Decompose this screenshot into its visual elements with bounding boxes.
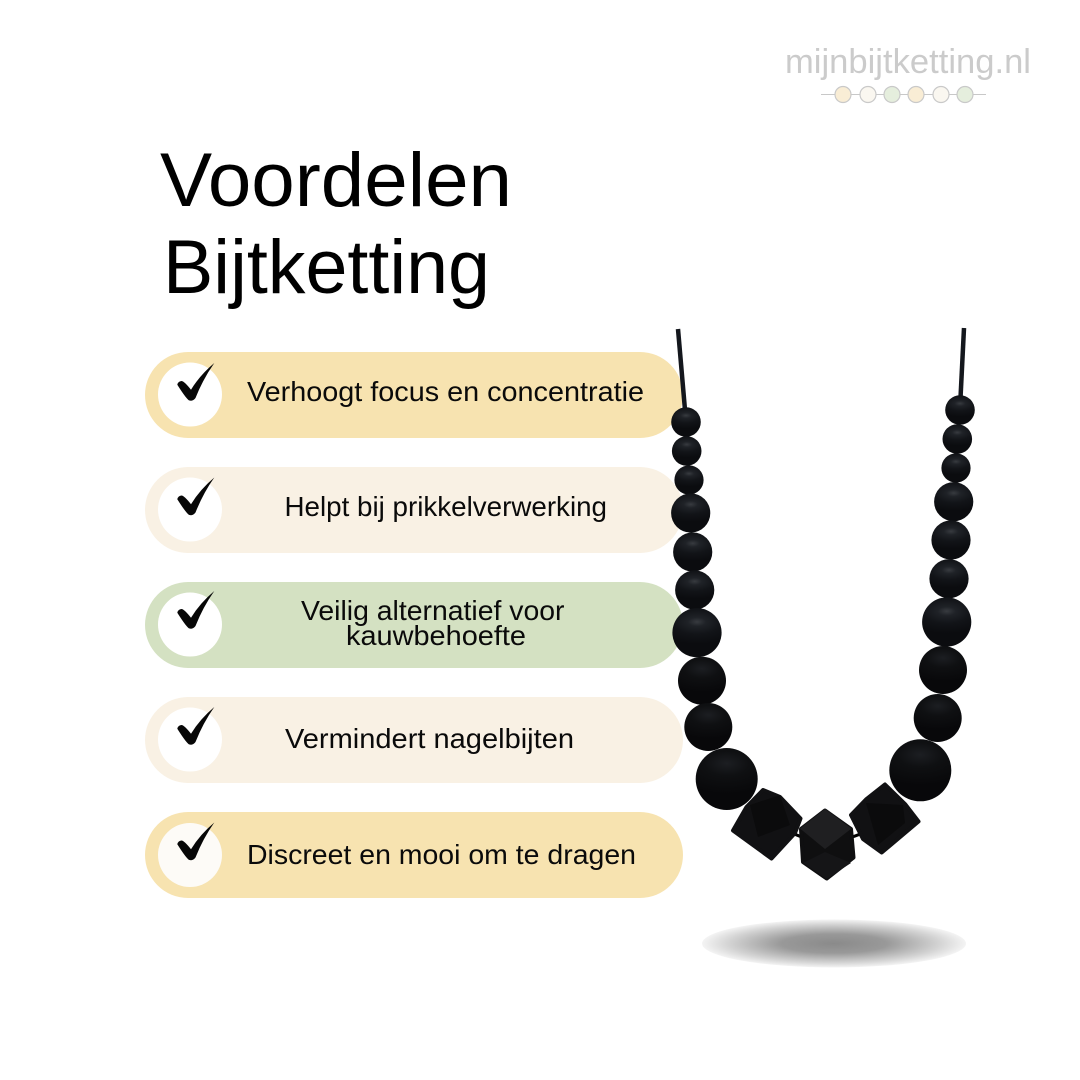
title: Voordelen — [160, 138, 512, 223]
logo: mijnbijtketting.nl: mijnbijtketting.nl — [785, 43, 1031, 81]
benefit: Verhoogt focus en concentratie: Verhoogt focus en concentratie — [247, 376, 644, 407]
benefit: Vermindert nagelbijten — [145, 697, 683, 783]
logo: mijnbijtketting.nl — [785, 43, 1031, 102]
benefit: Vermindert nagelbijten: Vermindert nagelbijten — [285, 723, 574, 754]
benefit: Veilig alternatief voor kauwbehoefte: Veilig alternatief voor — [301, 595, 564, 626]
necklace — [671, 328, 975, 879]
benefit: Discreet en mooi om te dragen — [145, 812, 683, 898]
title — [160, 138, 512, 310]
benefit: Discreet en mooi om te dragen: Discreet en mooi om te dragen — [247, 839, 636, 870]
beads: left strand — [671, 407, 758, 810]
benefit: Helpt bij prikkelverwerking — [145, 467, 683, 553]
title: Bijtketting — [163, 225, 490, 310]
hexagonal bead: center — [800, 809, 854, 879]
hexagonal bead: left — [733, 790, 800, 858]
benefit: Veilig alternatief voor kauwbehoefte: kauwbehoefte — [346, 620, 526, 651]
necklace shadow — [702, 920, 966, 968]
beads: right strand — [889, 395, 975, 801]
benefit: Veilig alternatief voor kauwbehoefte — [145, 582, 683, 668]
cord — [678, 328, 964, 841]
benefit: Verhoogt focus en concentratie — [145, 352, 683, 438]
hexagonal bead: right — [851, 784, 918, 852]
benefit: Helpt bij prikkelverwerking: Helpt bij prikkelverwerking — [284, 491, 607, 522]
